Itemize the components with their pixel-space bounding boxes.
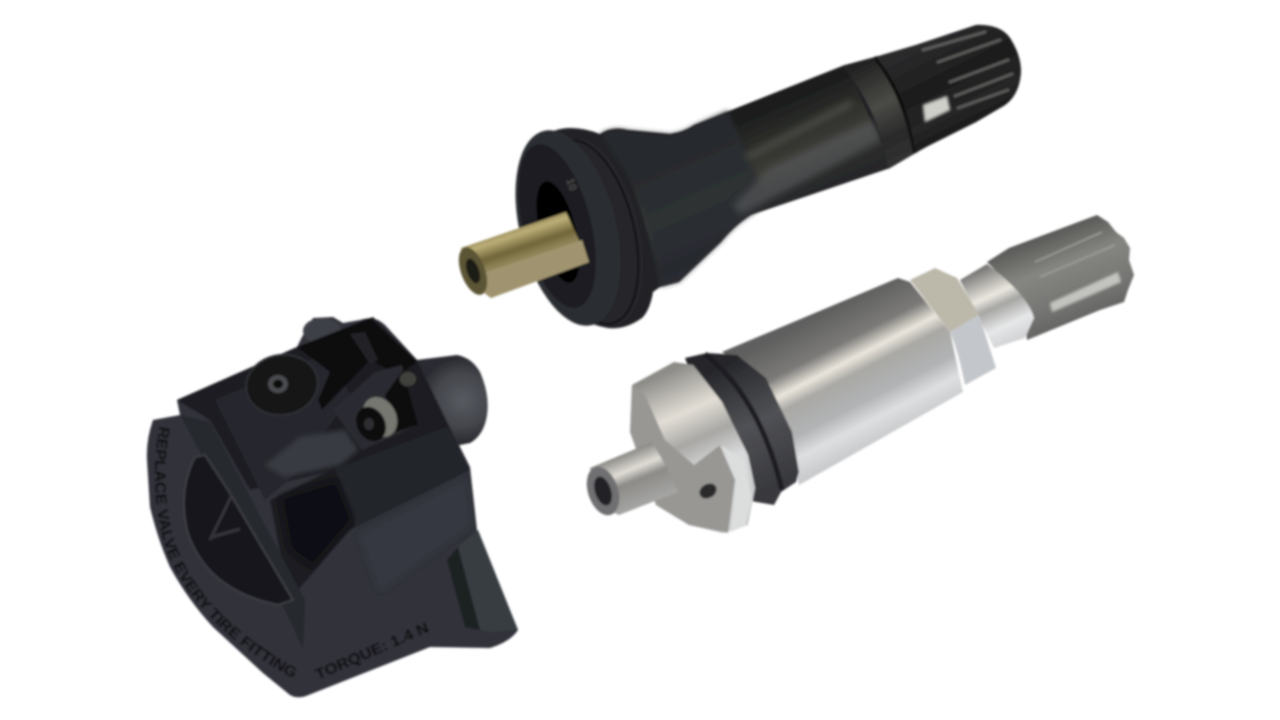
black TPMS sensor housing <box>145 315 520 699</box>
flange embossed text: replace valve: REPLACE VALVE EVERY TIRE FITTING <box>154 426 296 678</box>
brass end face <box>453 243 493 299</box>
lower front face <box>292 470 480 653</box>
cap knurl highlight <box>1050 272 1121 312</box>
clamp bracket <box>297 318 417 410</box>
fin gusset <box>458 530 518 632</box>
flange front face <box>497 119 639 337</box>
flange bore <box>528 177 588 287</box>
main body <box>722 278 963 485</box>
upper bump <box>303 318 341 344</box>
flange rear rim <box>523 127 661 337</box>
collar ring <box>842 57 928 169</box>
metal flange <box>630 362 755 533</box>
flange cut face <box>630 385 735 533</box>
front upper block <box>333 427 470 530</box>
flange marking: 10 <box>563 177 579 193</box>
rubber ring <box>685 353 799 505</box>
sloped ridge <box>265 430 358 477</box>
left diagonal rib <box>180 415 305 650</box>
brass stem <box>461 212 589 298</box>
top face <box>177 317 460 490</box>
black rubber snap-in valve stem <box>453 25 1021 337</box>
flange embossed text: torque: TORQUE: 1.4 N <box>314 622 429 678</box>
stem silhouette underlay <box>518 25 1021 328</box>
cross bars <box>210 495 240 540</box>
hex nut <box>910 268 979 332</box>
screw window <box>333 365 418 450</box>
neck <box>960 264 1034 348</box>
flange side hole <box>697 480 719 502</box>
round valve seat <box>241 349 323 421</box>
valve tip <box>590 442 678 515</box>
ribbed cap <box>876 25 1021 153</box>
base outline <box>147 317 518 697</box>
cap highlight <box>923 96 950 122</box>
side nub <box>417 355 488 447</box>
rubber body <box>600 65 892 287</box>
glossy highlight <box>733 120 880 215</box>
recessed disc <box>184 455 293 605</box>
grey ribbed cap <box>987 215 1134 340</box>
screw <box>350 391 404 446</box>
small rivet <box>399 371 417 387</box>
dark pit <box>270 468 355 605</box>
silver metal clamp-in valve stem <box>581 215 1134 533</box>
